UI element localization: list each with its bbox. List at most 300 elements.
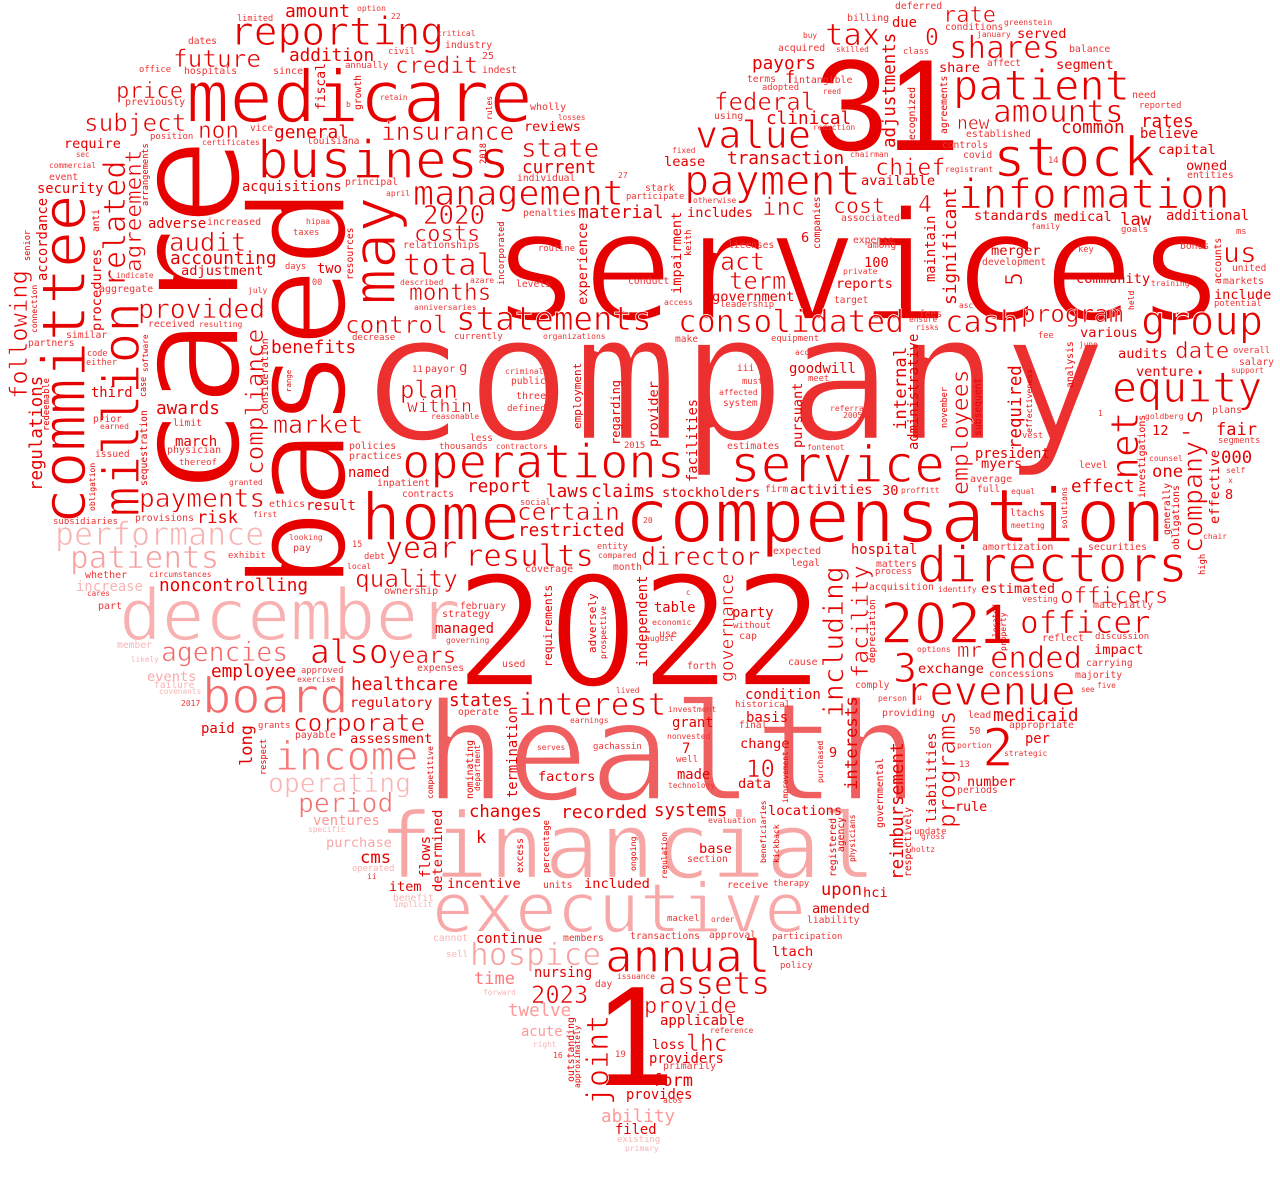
- medium keywords: act: [720, 247, 765, 276]
- pale tiny terms: right: [533, 1040, 556, 1049]
- tiny terms: c: [686, 588, 691, 597]
- tiny terms: fixed: [672, 146, 695, 155]
- tiny terms: provisions: [135, 513, 194, 524]
- tiny terms: legal: [791, 558, 820, 569]
- vertical small terms: located: [991, 604, 1000, 637]
- tiny terms: fees: [919, 309, 942, 320]
- vertical small terms: investigations: [1137, 415, 1148, 498]
- tiny terms: five: [1097, 681, 1116, 690]
- tiny terms: increased: [207, 217, 261, 228]
- small terms: events: [147, 669, 196, 685]
- pale tiny terms: specific: [308, 825, 346, 834]
- tiny terms: governing: [446, 636, 490, 645]
- pale tiny terms: sell: [446, 949, 468, 960]
- tiny terms: referral: [830, 404, 869, 413]
- small terms: amount: [285, 1, 350, 22]
- vertical small terms: adjustments: [880, 33, 900, 148]
- small terms: paid: [201, 721, 235, 737]
- tiny terms: affected: [719, 388, 758, 397]
- small terms: exchange: [918, 661, 984, 677]
- tiny terms: chair: [1203, 532, 1227, 541]
- word: stock: stock: [993, 126, 1156, 189]
- medium keywords: patients: [70, 540, 219, 576]
- tiny terms: local: [347, 562, 371, 571]
- word: financial: financial: [378, 793, 876, 900]
- medium keywords: payments: [139, 484, 265, 514]
- small terms: k: [476, 828, 486, 848]
- tiny terms: options: [917, 645, 951, 654]
- medium keywords: amounts: [993, 94, 1124, 130]
- small terms: require: [64, 136, 121, 152]
- tiny terms: must: [742, 377, 763, 387]
- small terms: served: [1017, 26, 1066, 42]
- tiny terms: august: [645, 634, 674, 643]
- tiny terms: policy: [780, 961, 813, 971]
- medium keywords: including: [817, 566, 850, 718]
- tiny terms: ownership: [384, 586, 438, 597]
- tiny terms: units: [543, 880, 572, 891]
- vertical small terms: governmental: [875, 758, 886, 828]
- tiny terms: discussion: [1095, 632, 1149, 642]
- tiny terms: system: [723, 398, 758, 409]
- tiny terms: ltachs: [1010, 508, 1045, 519]
- word: services: services: [490, 179, 1227, 357]
- medium keywords: employees: [947, 369, 974, 495]
- vertical small terms: determined: [430, 810, 446, 892]
- vertical small terms: high: [1198, 554, 1208, 575]
- small terms: transaction: [727, 149, 844, 169]
- tiny terms: since: [273, 66, 303, 77]
- tiny terms: make: [675, 334, 698, 345]
- tiny terms: july: [248, 286, 267, 295]
- tiny terms: greenstein: [1004, 18, 1052, 27]
- tiny terms: receive: [727, 880, 768, 891]
- word: annual: annual: [605, 929, 770, 983]
- small terms: effect: [1071, 477, 1135, 497]
- small terms: acute: [521, 1024, 563, 1040]
- medium keywords: patient: [953, 61, 1130, 110]
- vertical small terms: independent: [635, 576, 651, 667]
- medium keywords: joint: [581, 1015, 616, 1105]
- medium keywords: shares: [949, 30, 1060, 66]
- tiny terms: vice: [250, 123, 273, 134]
- small terms: incentive: [447, 876, 521, 892]
- tiny terms: strategic: [1004, 749, 1048, 758]
- tiny terms: industry: [445, 40, 492, 51]
- tiny terms: average: [970, 474, 1012, 485]
- word: board: board: [202, 669, 349, 725]
- small terms: material: [578, 202, 664, 223]
- tiny terms: 2005: [843, 411, 862, 420]
- small terms: 12: [1152, 423, 1168, 439]
- tiny terms: expenses: [417, 663, 464, 674]
- tiny terms: providing: [882, 708, 935, 719]
- tiny terms: section: [687, 854, 728, 865]
- word: business: business: [257, 130, 510, 191]
- tiny terms: buy: [803, 31, 817, 40]
- tiny terms: exhibit: [228, 551, 266, 561]
- medium keywords: state: [521, 134, 599, 164]
- tiny terms: limit: [173, 418, 202, 429]
- small terms: continue: [476, 931, 542, 947]
- tiny terms: 20: [643, 516, 653, 525]
- small terms: reviews: [524, 119, 581, 135]
- small terms: managed: [435, 621, 494, 637]
- tiny terms: levels: [516, 279, 551, 290]
- tiny terms: forth: [687, 661, 717, 672]
- medium keywords: operating: [268, 768, 411, 799]
- tiny terms: issuance: [617, 972, 655, 981]
- tiny terms: louisiana: [307, 136, 360, 147]
- pale tiny terms: primary: [625, 1144, 659, 1153]
- small terms: benefits: [271, 338, 356, 358]
- tiny terms: month: [613, 562, 642, 573]
- tiny terms: economic: [652, 617, 692, 627]
- tiny terms: first: [253, 510, 277, 519]
- small terms: estimated: [981, 581, 1055, 597]
- vertical small terms: november: [940, 387, 950, 428]
- tiny terms: training: [1151, 279, 1190, 288]
- small terms: applicable: [660, 1013, 744, 1029]
- word: 1: 1: [595, 957, 674, 1116]
- pale tiny terms: [117, 640, 660, 1153]
- tiny terms: used: [502, 659, 525, 670]
- small terms: addition: [289, 46, 374, 66]
- tiny terms: acquisition: [869, 582, 934, 593]
- small terms: ventures: [313, 813, 380, 829]
- vertical small terms: case: [138, 377, 148, 397]
- small terms: include: [1214, 287, 1271, 303]
- tiny terms: debt: [364, 552, 385, 562]
- tiny terms: gachassin: [593, 742, 642, 752]
- small terms: filed: [615, 1122, 657, 1138]
- vertical small terms: effective: [1207, 450, 1223, 524]
- small terms: two: [317, 261, 342, 277]
- vertical small terms: growth: [353, 75, 364, 110]
- small terms: medical: [1054, 209, 1112, 225]
- tiny terms: goals: [1121, 225, 1148, 235]
- tiny terms: estimates: [727, 441, 780, 452]
- tiny terms: need: [1132, 90, 1156, 101]
- medium keywords: lhc: [686, 1031, 728, 1057]
- small terms: states: [449, 691, 513, 711]
- tiny terms: exercise: [297, 675, 336, 684]
- word: may: may: [340, 197, 410, 305]
- small terms: increase: [76, 579, 143, 595]
- medium keywords: costs: [414, 222, 480, 247]
- vertical small terms: consideration: [260, 338, 271, 415]
- tiny terms: 19: [615, 1050, 626, 1060]
- vertical small terms: requirements: [541, 585, 555, 667]
- vertical small terms: kickback: [772, 824, 781, 863]
- medium keywords: 2023: [531, 981, 588, 1009]
- medium keywords: tax: [825, 18, 880, 53]
- tiny terms: private: [843, 266, 878, 276]
- tiny terms: family: [1031, 222, 1060, 231]
- small terms: twelve: [508, 1001, 571, 1021]
- tiny terms: public: [511, 376, 546, 387]
- tiny terms: full: [977, 484, 1000, 495]
- vertical small terms: impairment: [669, 212, 685, 294]
- word: compensation: compensation: [624, 472, 1166, 560]
- small terms: activities: [790, 482, 872, 498]
- tiny terms: conduct: [628, 276, 669, 287]
- medium keywords: credit: [395, 53, 478, 79]
- tiny terms: person: [878, 694, 907, 703]
- pale tiny terms: forward: [483, 988, 516, 997]
- small terms: reports: [836, 276, 893, 292]
- medium keywords: statements: [456, 300, 652, 338]
- small terms: clinical: [766, 109, 851, 129]
- vertical small terms: depreciation: [868, 599, 878, 663]
- small terms: regulatory: [350, 695, 432, 711]
- vertical small terms: physicians: [848, 814, 857, 862]
- small terms: 30: [882, 483, 898, 499]
- small terms: claims: [591, 482, 655, 502]
- tiny terms: stark: [645, 183, 675, 194]
- tiny terms: similar: [66, 330, 107, 341]
- tiny terms: looking: [289, 533, 323, 542]
- tiny terms: use: [659, 629, 677, 640]
- medium keywords: value: [695, 113, 811, 158]
- medium keywords: director: [641, 542, 760, 571]
- small terms: march: [175, 434, 217, 450]
- tiny terms: office: [139, 65, 171, 75]
- small terms: purchase: [326, 835, 392, 851]
- small terms: segment: [1056, 57, 1114, 73]
- tiny terms: whether: [85, 570, 127, 581]
- word: service: service: [730, 436, 945, 495]
- tiny terms: compared: [598, 551, 637, 560]
- tiny terms: described: [400, 278, 444, 287]
- small terms: standards: [974, 208, 1048, 224]
- small terms: general: [274, 122, 349, 143]
- tiny terms: iii: [737, 363, 755, 374]
- pale tiny terms: benefit: [393, 893, 434, 904]
- tiny terms: 27: [618, 171, 628, 180]
- tiny terms: primarily: [663, 1061, 716, 1072]
- medium keywords: net: [1103, 411, 1147, 480]
- small terms: healthcare: [351, 674, 458, 695]
- tiny terms: coverage: [525, 564, 573, 575]
- word: health: health: [424, 674, 919, 833]
- tiny terms: equipment: [771, 334, 819, 344]
- vertical small terms: internal: [891, 347, 911, 430]
- small terms: payors: [752, 54, 816, 74]
- tiny terms: investment: [668, 705, 716, 714]
- small terms: various: [1080, 325, 1138, 341]
- small terms: included: [584, 876, 650, 892]
- tiny terms: 2015: [624, 441, 645, 451]
- medium keywords: quality: [355, 564, 458, 593]
- medium keywords: provide: [644, 994, 737, 1019]
- tiny terms: evaluation: [708, 816, 756, 825]
- vertical small terms: registered: [828, 818, 839, 877]
- tiny terms: commercial: [49, 161, 96, 170]
- tiny terms: intangible: [793, 75, 853, 86]
- tiny terms: concessions: [989, 669, 1054, 680]
- medium keywords: years: [388, 643, 456, 669]
- vertical small terms: companies: [812, 196, 823, 249]
- small terms: recorded: [561, 802, 647, 823]
- tiny terms: sec: [76, 150, 90, 159]
- vertical small terms: employment: [571, 363, 584, 429]
- vertical small terms: keith: [684, 230, 694, 256]
- tiny terms: cause: [788, 657, 818, 668]
- tiny terms: subsidiaries: [53, 517, 118, 527]
- medium keywords: company's: [1178, 409, 1209, 553]
- tiny terms: hipaa: [306, 217, 330, 226]
- tiny terms: code: [87, 349, 107, 359]
- tiny terms: contractors: [496, 442, 548, 451]
- tiny terms: covid: [963, 150, 992, 161]
- small terms: 9: [829, 745, 837, 761]
- tiny terms: strategy: [442, 609, 490, 620]
- tiny terms: b: [346, 100, 351, 109]
- vertical small terms: maintain: [923, 216, 939, 282]
- tiny terms: periods: [957, 785, 998, 796]
- tiny terms: lead: [968, 710, 991, 721]
- tiny terms: potential: [1214, 299, 1262, 309]
- tiny terms: circumstances: [149, 570, 212, 579]
- medium keywords: 4: [918, 192, 932, 218]
- tiny terms: relationships: [403, 240, 480, 251]
- vertical small terms: sequestration: [139, 410, 150, 486]
- tiny terms: leadership: [720, 300, 774, 310]
- medium keywords: 0: [925, 25, 939, 51]
- tiny terms: goldberg: [1145, 412, 1184, 421]
- small terms: time: [474, 969, 515, 989]
- tiny terms: previously: [125, 97, 185, 108]
- tiny terms: terms: [747, 74, 776, 85]
- tiny terms: currently: [454, 332, 503, 342]
- tiny terms: order: [711, 915, 735, 924]
- tiny terms: class: [903, 47, 929, 57]
- small terms: employee: [211, 662, 296, 682]
- tiny terms: liability: [807, 915, 860, 926]
- vertical small terms: approximately: [573, 1025, 582, 1088]
- tiny terms: balance: [1069, 44, 1110, 55]
- tiny terms: expected: [773, 546, 821, 557]
- tiny terms: position: [150, 132, 193, 142]
- vertical small terms: beneficiaries: [759, 800, 768, 863]
- tiny terms: february: [460, 601, 506, 612]
- medium keywords: compliance: [240, 329, 269, 475]
- small terms: item: [389, 879, 422, 895]
- vertical small terms: purchased: [816, 741, 825, 783]
- pale tiny terms: member: [117, 640, 152, 651]
- medium keywords: facility: [846, 565, 874, 678]
- vertical small terms: reimbursement: [888, 742, 908, 880]
- tiny terms: entity: [597, 542, 628, 552]
- medium keywords: mr: [957, 638, 982, 662]
- tiny terms: aco: [795, 348, 809, 357]
- small terms: adjustment: [181, 263, 263, 279]
- medium keywords: provided: [138, 294, 265, 325]
- tiny terms: comply: [855, 680, 890, 691]
- medium keywords: ended: [990, 641, 1082, 676]
- medium keywords: 10: [746, 755, 775, 783]
- vertical small terms: provider: [646, 381, 662, 447]
- tiny terms: civil: [388, 47, 415, 57]
- medium keywords: price: [116, 78, 183, 104]
- medium keywords: officer: [1020, 605, 1151, 641]
- small terms: medicaid: [993, 705, 1079, 726]
- small terms: goodwill: [789, 361, 856, 377]
- tiny terms: development: [982, 257, 1046, 268]
- tiny terms: wholly: [530, 102, 566, 113]
- small terms: government: [712, 289, 794, 305]
- medium keywords: federal: [714, 88, 815, 116]
- vertical small terms: interests: [842, 696, 862, 790]
- tiny terms: april: [386, 189, 410, 198]
- tiny terms: taxes: [293, 228, 319, 238]
- word: december: december: [119, 574, 461, 657]
- small terms: ltach: [772, 944, 813, 960]
- small terms: available: [861, 173, 935, 189]
- tiny terms: principal: [345, 177, 398, 188]
- small terms: cms: [360, 848, 391, 868]
- tiny terms: critical: [437, 29, 476, 38]
- medium keywords: plan: [400, 376, 458, 404]
- small terms: laws: [546, 482, 589, 502]
- small terms: merger: [991, 243, 1040, 259]
- vertical small terms: regarding: [609, 380, 623, 445]
- pale tiny terms: existing: [617, 1135, 660, 1145]
- tiny terms: approved: [301, 666, 343, 676]
- vertical small terms: respectively: [903, 807, 914, 877]
- small terms: provides: [626, 1087, 692, 1103]
- tiny terms: dates: [188, 36, 217, 47]
- small terms: president: [975, 446, 1050, 462]
- medium keywords: management: [413, 174, 624, 214]
- tiny terms: transactions: [630, 931, 700, 942]
- tiny terms: contracts: [402, 489, 454, 500]
- small terms: 100: [864, 255, 889, 271]
- small terms: owned: [1186, 158, 1227, 174]
- tiny terms: licenses: [728, 240, 774, 251]
- medium keywords: non: [198, 118, 239, 144]
- vertical small terms: facilities: [685, 399, 701, 482]
- small terms: community: [1076, 271, 1150, 287]
- small terms: security: [37, 181, 103, 197]
- small terms: one: [1152, 462, 1183, 482]
- medium keywords: term: [729, 267, 786, 295]
- small terms: third: [91, 385, 133, 401]
- small terms: fair: [1216, 420, 1257, 440]
- tiny terms: indicate: [116, 271, 154, 280]
- tiny terms: 15: [352, 540, 362, 550]
- tiny terms: amortization: [982, 542, 1053, 553]
- vertical small terms: redeemable: [42, 378, 52, 431]
- tiny terms: three: [516, 391, 546, 402]
- tiny terms: operate: [458, 707, 499, 718]
- tiny terms: 11: [412, 365, 423, 375]
- vertical small terms: percentage: [542, 820, 552, 873]
- tiny terms: portion: [957, 740, 992, 750]
- small terms: providers: [649, 1051, 724, 1067]
- medium keywords: period: [298, 788, 393, 819]
- medium keywords: program: [1021, 299, 1123, 328]
- tiny terms: earnings: [570, 716, 609, 725]
- vertical small terms: held: [1127, 291, 1136, 310]
- tiny terms: otherwise: [693, 196, 737, 205]
- small terms: form: [652, 1071, 693, 1091]
- vertical small terms: subsequent: [973, 378, 984, 436]
- small terms: loss: [652, 1037, 685, 1053]
- medium keywords: group: [1141, 297, 1263, 345]
- vertical small terms: generally: [1162, 483, 1173, 535]
